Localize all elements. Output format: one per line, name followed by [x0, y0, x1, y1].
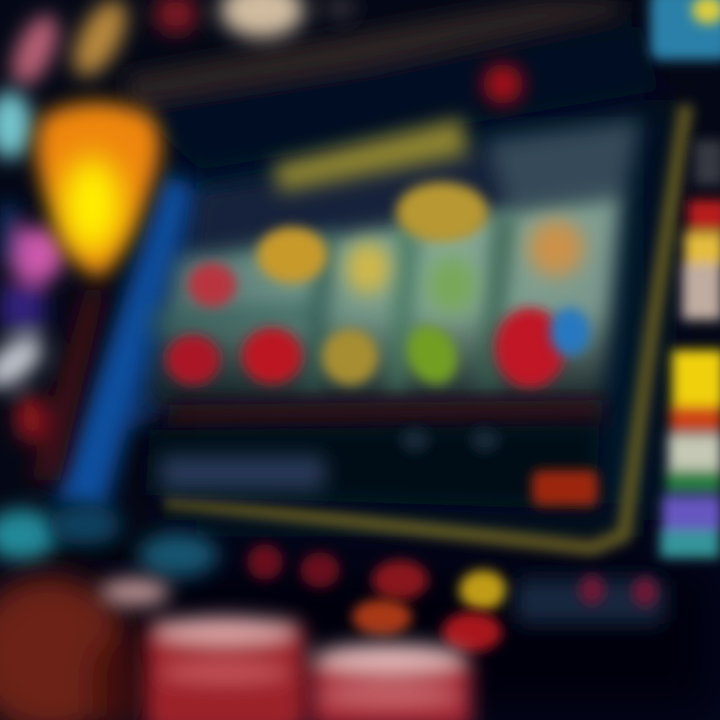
hand	[0, 575, 144, 720]
lamp core	[62, 157, 122, 253]
symbol: bottom row gold	[322, 329, 378, 385]
reel symbols	[166, 182, 590, 392]
top ledge	[125, 0, 660, 170]
symbol: bottom row green	[398, 318, 466, 392]
symbol: orange	[528, 220, 584, 276]
blue vertical band	[55, 175, 225, 510]
lower panel	[145, 425, 600, 510]
symbol: top row yellow	[346, 242, 390, 294]
symbol: top row gold	[257, 227, 327, 283]
gold frame	[165, 105, 686, 548]
reel dividers	[150, 215, 515, 390]
symbol: top row red	[188, 263, 236, 307]
left edge lights	[0, 91, 105, 561]
symbol: gold coin	[396, 182, 488, 242]
control deck buttons	[49, 505, 665, 652]
lamp glow	[36, 102, 160, 278]
right edge stripes	[660, 140, 720, 558]
reel screen	[150, 195, 622, 405]
top-left coloured lights	[3, 0, 356, 92]
symbol: top row green	[428, 257, 476, 313]
symbol: red and blue wheel	[495, 308, 590, 388]
lower screen dark red line	[165, 400, 605, 428]
small indicators	[400, 428, 500, 452]
red indicator light	[483, 64, 523, 104]
symbol: bottom row red left	[166, 335, 220, 385]
info bar	[160, 455, 325, 491]
screen header dark panel	[190, 120, 640, 260]
lamp	[36, 102, 160, 278]
symbol: bottom row red heart	[242, 328, 302, 384]
red button on panel	[532, 470, 598, 506]
red and white striped chips	[100, 578, 472, 720]
top-right light	[650, 0, 720, 60]
gold sign	[272, 118, 468, 192]
